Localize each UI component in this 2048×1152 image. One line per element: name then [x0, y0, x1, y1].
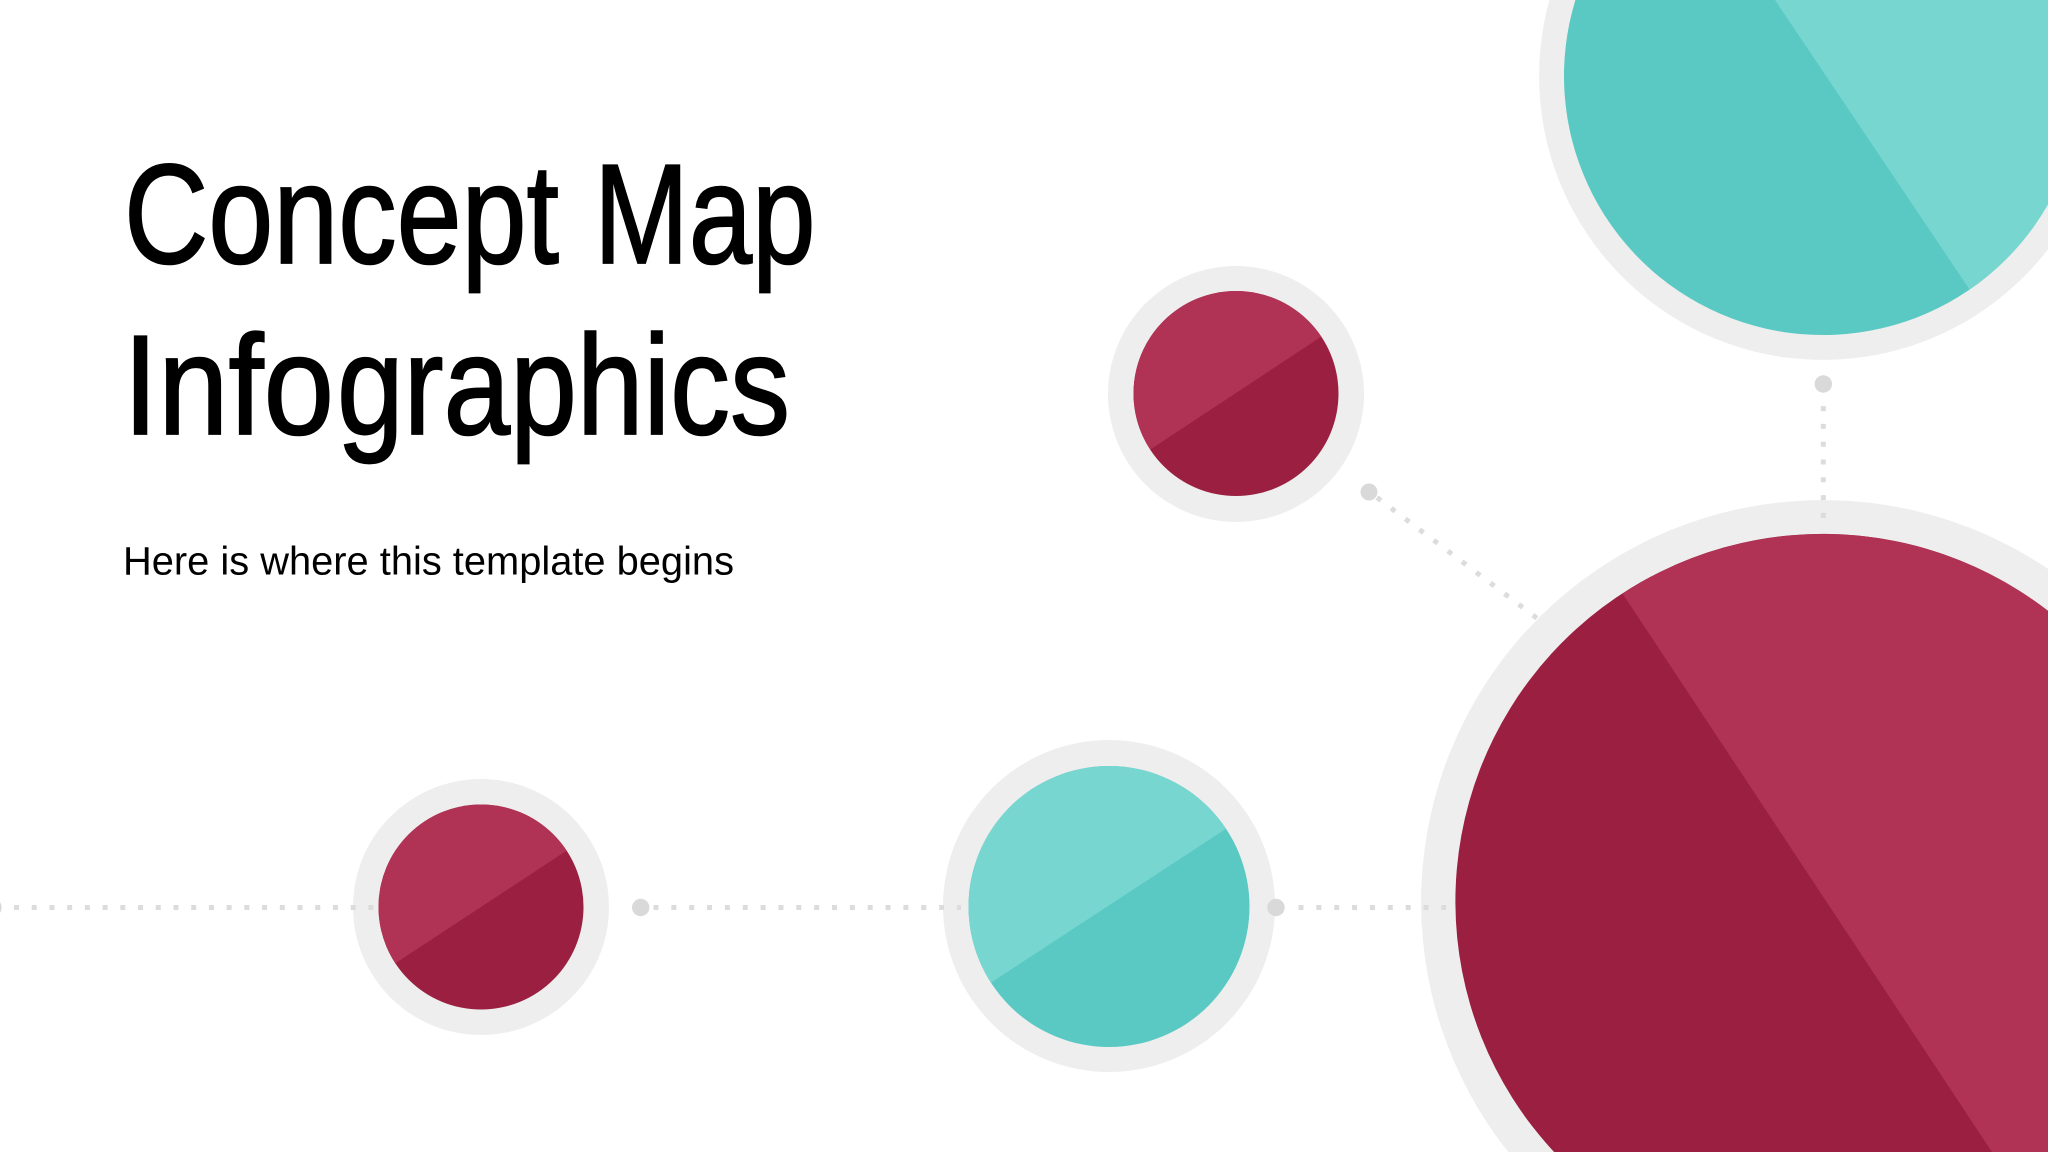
title: Concept: [124, 135, 559, 294]
subtitle: Here is where this template begins: [123, 540, 734, 584]
title: [123, 135, 816, 465]
connector: dotted line between maroon and teal nodes: [632, 899, 961, 916]
connector: dotted line between teal and large maroon nodes: [1267, 899, 1446, 916]
node: top teal circle: [1539, 0, 2048, 360]
title: Info: [123, 306, 334, 465]
connector: left dotted line: [0, 902, 374, 913]
connector: diagonal dotted line: [1360, 484, 1538, 619]
node: large maroon circle: [1421, 500, 2048, 1152]
node: lower middle teal circle: [943, 740, 1275, 1072]
title: graphics: [337, 306, 790, 465]
node: lower left maroon circle: [353, 779, 609, 1035]
node: upper small maroon circle: [1108, 266, 1364, 522]
connector: vertical dotted line: [1815, 375, 1832, 518]
title: Map: [594, 135, 816, 294]
